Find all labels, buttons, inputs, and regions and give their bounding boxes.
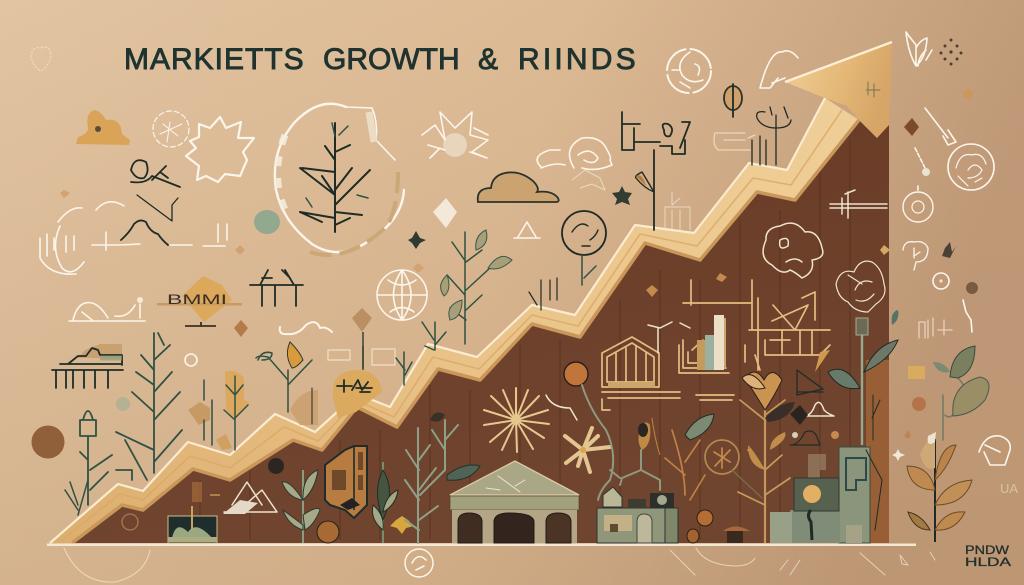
icon: dark flower stand [752, 107, 791, 165]
icon: orange diamond [904, 118, 919, 136]
wood grain streaks [200, 140, 850, 540]
icon: small flag triangle [797, 370, 823, 395]
arrow head small mark [866, 82, 880, 97]
arrow mid crease [62, 110, 842, 540]
icon: white swirl [537, 138, 612, 169]
icon: faint balloon [31, 47, 51, 71]
icon: teal blob [254, 210, 280, 234]
icon: dark small leaves [422, 322, 446, 350]
icon: white badge dot [185, 354, 197, 366]
icon: small cream bars [808, 454, 826, 480]
icon: orange ball on stem [546, 362, 613, 500]
icon: dark mound [790, 431, 820, 445]
icon: machine box [168, 506, 217, 543]
icon: white horn curve [760, 51, 798, 88]
tree [300, 123, 370, 232]
icon: temple [450, 461, 579, 543]
panel: brown area under the growth line [72, 120, 889, 543]
icon: signpost [622, 112, 690, 230]
icon: dark dot [268, 458, 284, 474]
icon: cream brain outline [763, 223, 823, 278]
broken ring [275, 104, 404, 252]
icon: tall plant with teal leaves [828, 310, 898, 445]
icon: dark table mark [250, 270, 303, 306]
icon: faint circle [122, 514, 138, 530]
icon: wooden disc [32, 426, 64, 458]
growth arrow [50, 42, 892, 543]
logo mark [965, 543, 1011, 569]
icon: right faint glyphs [903, 242, 978, 294]
icon: bottom faint arcs [64, 548, 935, 582]
icon: gold badge with label: BMMI [167, 291, 227, 307]
arrow ribbon [50, 98, 859, 543]
icon: gold cloud clip [76, 110, 130, 145]
icon: sun spot [963, 89, 973, 99]
title: RIINDS [518, 43, 639, 76]
icon: white rose circle [903, 186, 933, 222]
icon: white clouds line [69, 297, 145, 321]
icon: white wave line [280, 322, 332, 334]
icon: dark sprig [131, 160, 180, 187]
icon: orange sun badge [333, 370, 382, 418]
icon: dark flower sprig [790, 405, 808, 425]
icon: bottom white emblem [405, 549, 433, 577]
icon: tree tall left [116, 333, 182, 480]
icon: small tan diamonds [60, 190, 424, 273]
icon: upper-right branch leaves [933, 346, 989, 440]
icon: white bumps [806, 402, 834, 416]
orange strip at right edge [866, 360, 889, 543]
icon: white dotted pin [915, 148, 930, 176]
icon: cream antenna lines [830, 190, 887, 218]
baseline [47, 544, 916, 546]
icon: small emblem on brown [192, 482, 220, 502]
icon: pier structure [52, 344, 123, 388]
icon: sprout top of the ribbon [441, 230, 512, 344]
icon: sign boxes [328, 346, 395, 368]
icon: bar chart frame [679, 315, 734, 400]
icon: gold envelope [908, 366, 925, 379]
icon: house frame [602, 337, 680, 410]
icon: outlined cloud [478, 172, 559, 202]
icon: white mountains [223, 482, 277, 514]
icon: round orange [317, 521, 339, 543]
icon: leafy plant two [372, 462, 398, 543]
icon: bud with branches [610, 422, 660, 490]
icon: brown ball [912, 397, 926, 411]
logo mark: PNDW [965, 543, 1010, 557]
icon: cream star flower [565, 428, 610, 472]
icon: mushroom and bulbs [687, 510, 750, 543]
icon: yellow flower [390, 516, 414, 534]
icon: plant with teal leaf [652, 414, 714, 500]
icon: white sparkle [892, 449, 905, 461]
icon: white star outline [186, 117, 254, 182]
icon: tiny star [904, 430, 911, 439]
icon: gold badge with label [157, 276, 242, 326]
icon: small pale dome [116, 397, 130, 411]
title: MARKIETTS [124, 43, 305, 76]
arrow top highlight [50, 98, 825, 543]
icon: small dark bars [529, 278, 557, 310]
icon: dark sparkle [408, 231, 426, 249]
arrow head [785, 42, 892, 138]
arrow head highlight [785, 42, 892, 82]
icon: faint letters: UA [1000, 481, 1018, 496]
icon: right tower [839, 395, 882, 543]
logo mark: HLDA [965, 555, 1011, 569]
icon: orange building shield [325, 446, 367, 518]
icon: seal circle [705, 440, 762, 498]
icon: flower stem left [256, 342, 318, 425]
icon: scaffold drawing [683, 280, 830, 372]
icon: golden plants left [188, 371, 250, 450]
icon: dark ring flower [562, 211, 606, 285]
icon: dark dots cluster [940, 38, 962, 66]
icon: tan diamond leaf [234, 320, 248, 337]
icon: dandelion flower [484, 388, 549, 452]
icon: golden sapling [738, 372, 795, 543]
arrow darker under-edge [72, 120, 859, 543]
icon: rose outline [836, 261, 885, 312]
title: GROWTH [323, 43, 460, 76]
icon: white pin brush [925, 108, 956, 145]
icon: white sketch above the line [514, 170, 690, 238]
icon: white city circle and line motifs [40, 195, 227, 274]
title: & [478, 43, 498, 76]
icon: white train sketch [714, 133, 755, 150]
icon: dashed circle [153, 111, 189, 147]
icon: small dots on brown [646, 245, 890, 439]
icon: leafy plant three [405, 412, 480, 543]
icon: white spiral circle [667, 49, 711, 93]
icon: white circle brain [948, 144, 994, 190]
icon: white globe [377, 270, 427, 320]
icon: leafy plant one [282, 470, 320, 543]
icon: white shield [433, 198, 457, 228]
icon: right faint bars [919, 300, 972, 338]
icon: white emblem [422, 112, 488, 158]
icon: big ring with tree [275, 104, 404, 255]
icon: sprout by ribbon [396, 352, 412, 385]
icon: building complex [597, 487, 678, 543]
icon: clock machine [770, 478, 840, 543]
icon: white bucket [979, 436, 1010, 465]
icon: wind poles [648, 322, 690, 353]
icon: big bottom-right leaf plant [907, 432, 972, 542]
icon: white leaf top right [906, 32, 932, 66]
icon: tan shrub [352, 308, 372, 370]
icon: dark circle marker [724, 84, 742, 117]
icon: dark star [612, 186, 632, 205]
icon: padlock sapling [65, 411, 132, 515]
